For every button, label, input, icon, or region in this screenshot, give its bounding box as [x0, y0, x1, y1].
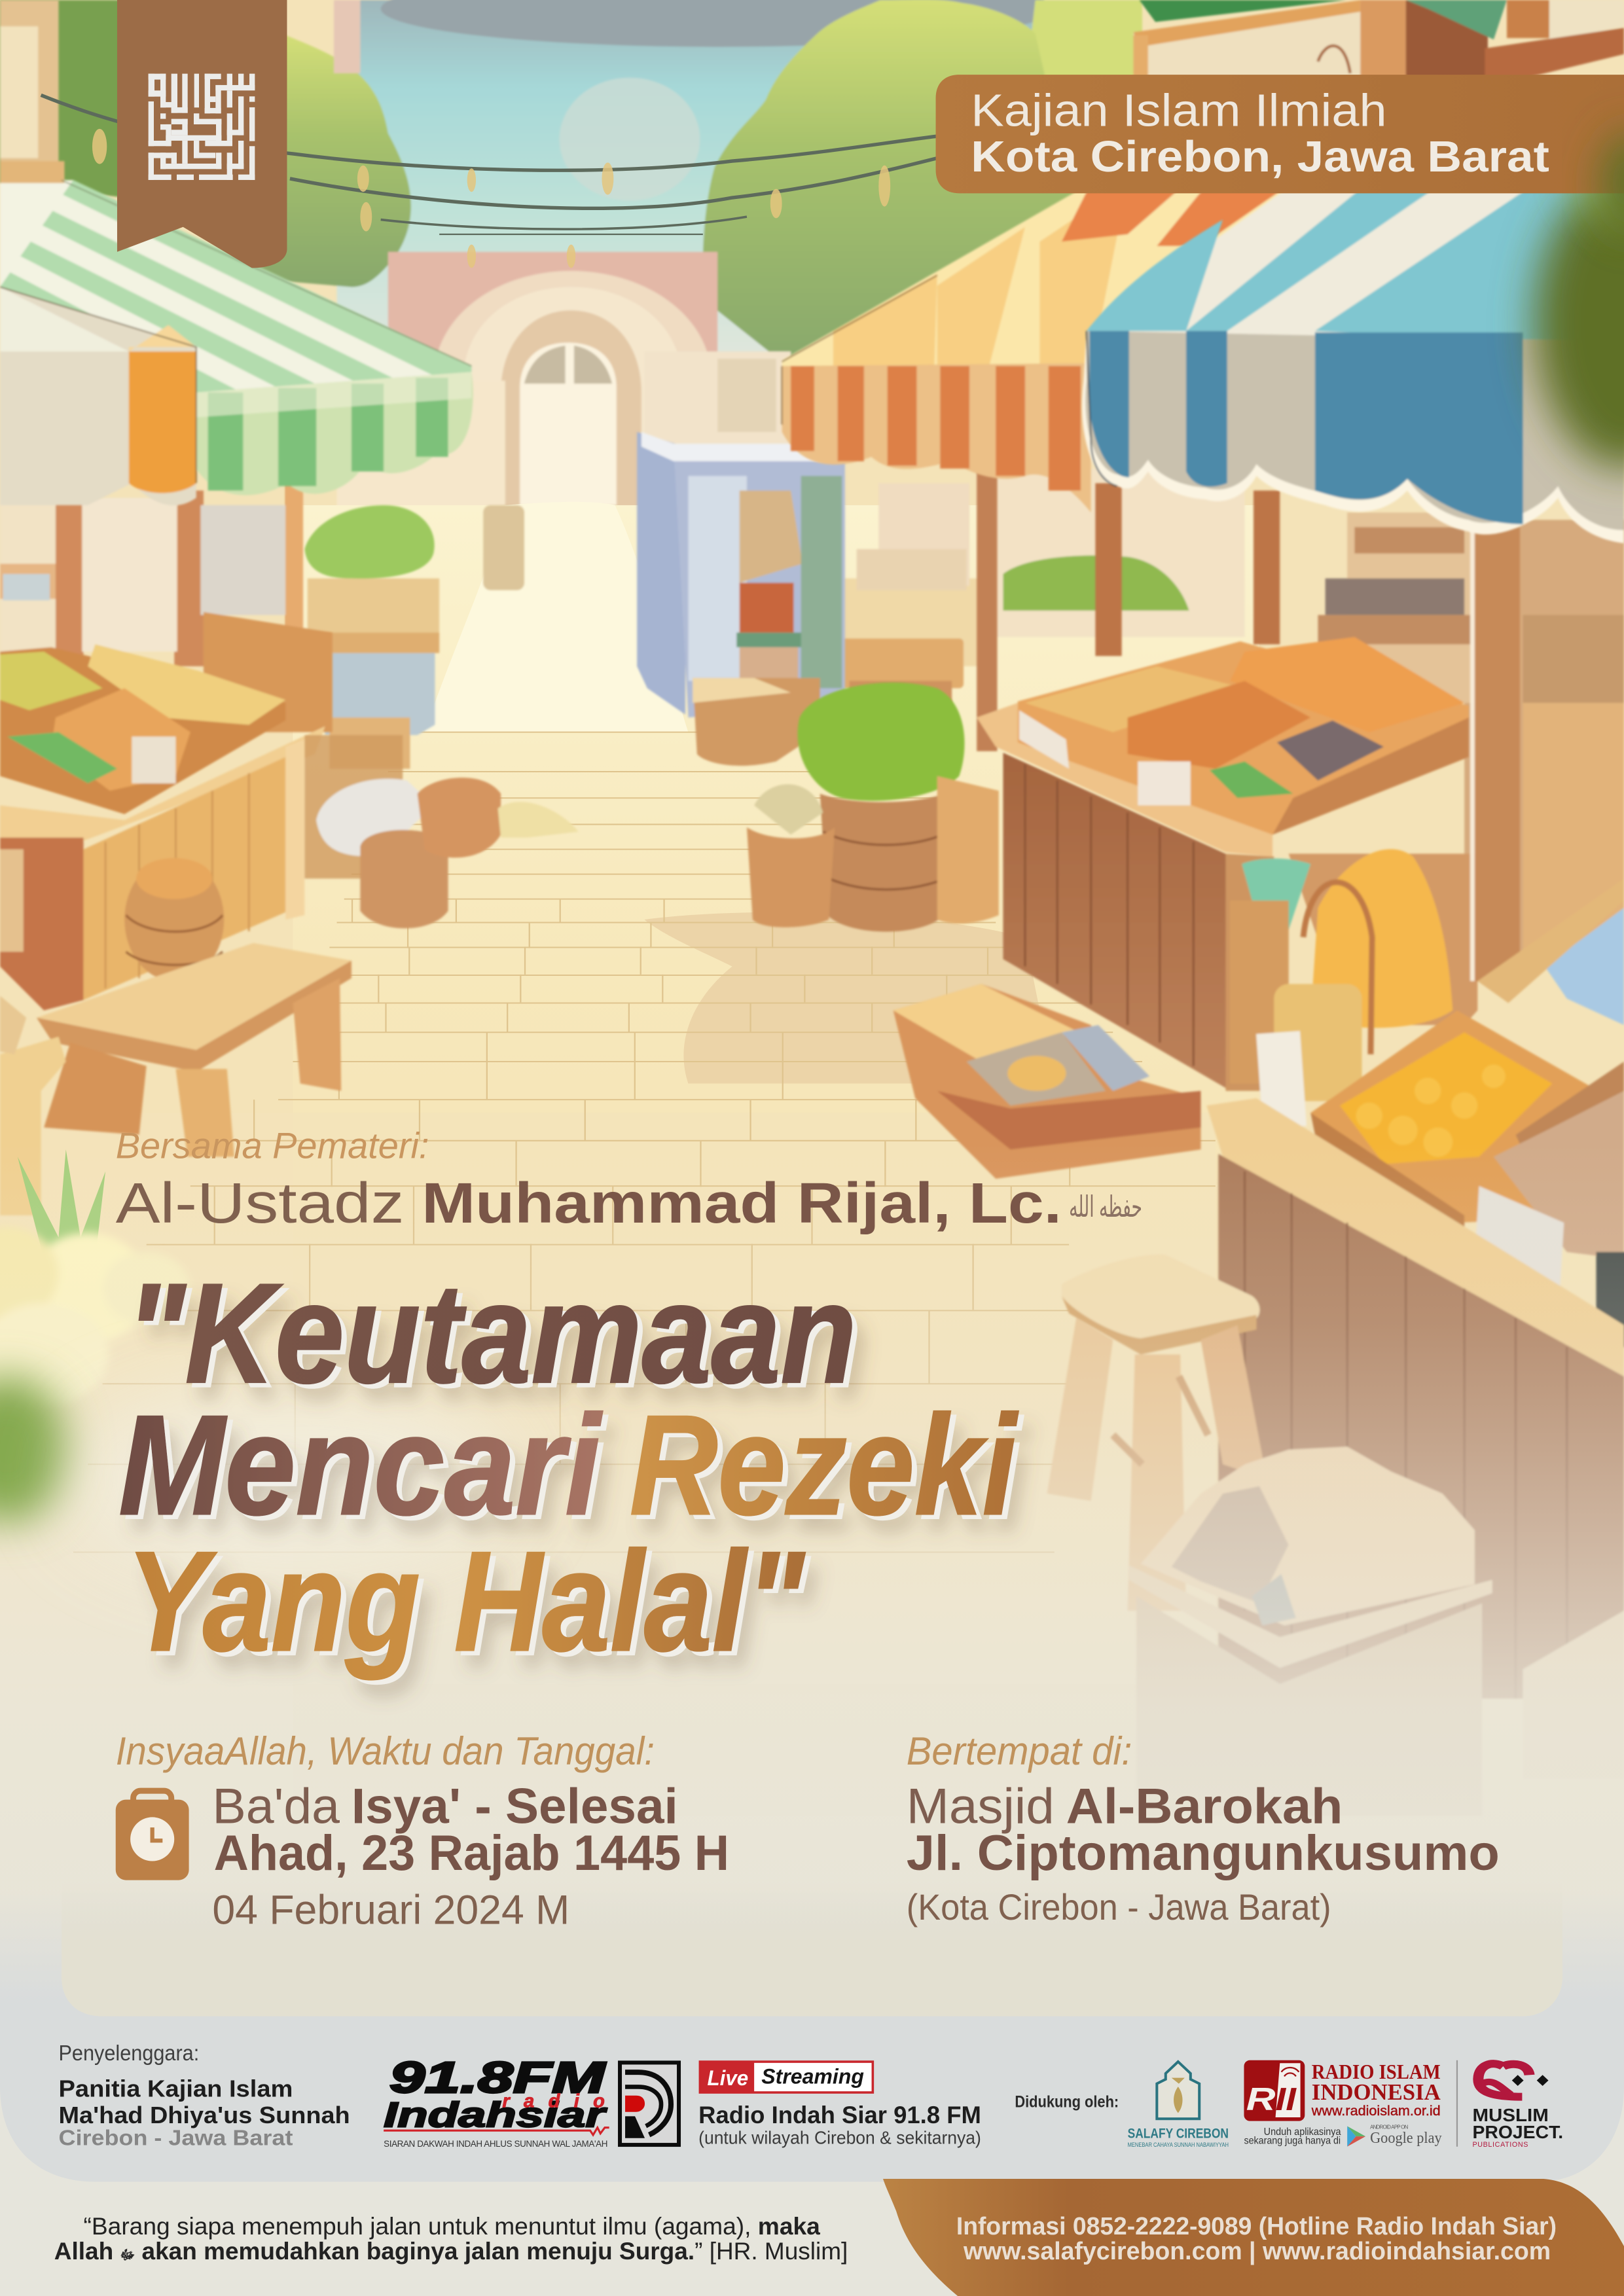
text: tagline: SIARAN DAKWAH INDAH AHLUS SUNNAH WAL JAMA'AH: [384, 2139, 607, 2149]
text: websites: www.salafycirebon.com | www.radioindahsiar.com: [963, 2238, 1551, 2265]
text: city: Kota Cirebon, Jawa Barat: [971, 132, 1549, 181]
text: title line three: Yang Halal": [126, 1522, 806, 1680]
scene: sky, trees and building: [0, 0, 1142, 703]
icon: RII square: II: [1276, 2081, 1297, 2117]
icon: play store triangle: [1347, 2126, 1365, 2147]
text: android app on: ANDROID APP ON: [1370, 2125, 1409, 2130]
icon: signal underline: [384, 2128, 609, 2135]
speaker block: [116, 1125, 1142, 1235]
text: app prompt line one: Unduh aplikasinya: [1264, 2126, 1341, 2138]
icon: kufic square: [149, 74, 255, 180]
text: supported by: Didukung oleh:: [1015, 2093, 1119, 2111]
icon: RII square: [1244, 2060, 1305, 2121]
text: speaker name: Muhammad Rijal, Lc.: [422, 1172, 1062, 1235]
text: venue city: (Kota Cirebon - Jawa Barat): [907, 1886, 1331, 1928]
panel: contact information: [883, 2179, 1624, 2296]
text: organizer city: Cirebon - Jawa Barat: [58, 2126, 293, 2151]
text: event series: Kajian Islam Ilmiah: [971, 84, 1387, 135]
text: title line two dark: Mencari: [118, 1386, 603, 1544]
panel: footer sponsor band: [0, 1882, 1624, 2181]
icon: live streaming badge: [700, 2062, 873, 2092]
text: radio: radio: [502, 2090, 605, 2111]
scene: solid lower background: [0, 2043, 1624, 2296]
scene: right market stall: [747, 458, 1624, 1816]
scene: left market stall: [0, 469, 579, 1215]
icon: clipboard clock: [116, 1791, 189, 1880]
text: title line one: "Keutamaan: [126, 1254, 857, 1412]
text: store label: Google play: [1370, 2129, 1442, 2147]
text: venue name: Al-Barokah: [1066, 1778, 1343, 1834]
icon: live streaming badge: Live: [708, 2066, 748, 2090]
text: publications: PUBLICATIONS: [1472, 2141, 1528, 2149]
scene: lamp strings: [41, 95, 937, 234]
text: venue label: Bertempat di:: [907, 1729, 1132, 1773]
text: quote line two: Allah ﷻ akan memudahkan baginya jalan menuju Surga.” [HR. Muslim]: [54, 2238, 848, 2265]
ribbon with kufic calligraphy: [117, 0, 287, 268]
divider between logos: [1456, 2060, 1458, 2147]
logo: radio islam indonesia: [1244, 2060, 1442, 2147]
icon: live streaming badge: Streaming: [761, 2065, 864, 2089]
text: organizer line one: Panitia Kajian Islam: [58, 2076, 293, 2102]
text: stream station: Radio Indah Siar 91.8 FM: [698, 2102, 981, 2128]
text: speaker title: Al-Ustadz: [116, 1172, 404, 1235]
main title: [118, 1254, 1019, 1680]
scene: white fade into lower panel: [0, 1142, 1624, 2050]
hadith quote: [54, 2213, 848, 2265]
text: speaker label: Bersama Pemateri:: [116, 1125, 429, 1166]
icon: hanging light bulbs: [92, 129, 890, 268]
event time block: [116, 1729, 729, 1933]
organizer text: [58, 2041, 350, 2151]
text: stream region: (untuk wilayah Cirebon & sekitarnya): [698, 2127, 981, 2147]
text: app prompt line two: sekarang juga hanya di: [1244, 2135, 1341, 2146]
text: time start: Ba'da: [212, 1778, 340, 1834]
scene: left awnings: [0, 0, 473, 505]
text: muslim: MUSLIM: [1472, 2105, 1549, 2125]
scene: paved walkway: [0, 502, 1259, 1816]
text: time label: InsyaaAllah, Waktu dan Tanggal:: [116, 1729, 655, 1773]
text: quote line one: “Barang siapa menempuh jalan untuk menuntut ilmu (agama), maka: [84, 2213, 820, 2240]
text: honorific: حفظه الله: [1069, 1191, 1142, 1223]
text: salafy name: SALAFY CIREBON: [1128, 2125, 1229, 2141]
scene: blurred leaves: [0, 132, 1624, 1567]
streaming block: [698, 2062, 981, 2147]
icon: heart mark: [1478, 2064, 1549, 2097]
scene: foreground vegetables: [0, 1149, 190, 1406]
icon: RII square: R: [1246, 2081, 1276, 2117]
scene: far stalls and greens: [285, 469, 1245, 769]
text: title line two accent: Rezeki: [630, 1386, 1019, 1544]
text: RII url: www.radioislam.or.id: [1311, 2103, 1441, 2119]
badge: event title: [936, 75, 1624, 234]
logo: radio indah siar: [384, 2053, 679, 2149]
logo: salafy cirebon: [1128, 2062, 1229, 2148]
text: hijri date: Ahad, 23 Rajab 1445 H: [214, 1825, 729, 1881]
scene: blurred leaf over badge: [1600, 132, 1624, 234]
text: salafy tagline: MENEBAR CAHAYA SUNNAH NABAWIYYAH: [1128, 2142, 1229, 2148]
text: gregorian date: 04 Februari 2024 M: [212, 1888, 569, 1933]
text: frequency: 91.8FM: [389, 2053, 607, 2102]
scene: right orange awning: [782, 183, 1303, 512]
scene: right blue awning: [1082, 183, 1624, 543]
text: organizer label: Penyelenggara:: [58, 2041, 199, 2066]
icon: station emblem: [620, 2062, 679, 2145]
logo: muslim project: [1472, 2064, 1563, 2149]
text: contact phone: Informasi 0852-2222-9089 (Hotline Radio Indah Siar): [956, 2213, 1557, 2240]
icon: mosque arch: [1157, 2062, 1199, 2119]
text: RII line one: RADIO ISLAM: [1312, 2060, 1441, 2083]
text: station name: Indahsiar: [384, 2096, 607, 2135]
scene: stall roof at top right: [1134, 0, 1624, 88]
text: venue prefix: Masjid: [907, 1778, 1055, 1834]
scene: refrigerator: [637, 432, 845, 766]
event venue block: [907, 1729, 1500, 1928]
text: street: Jl. Ciptomangunkusumo: [907, 1825, 1500, 1881]
text: RII line two: INDONESIA: [1312, 2080, 1441, 2105]
text: time range: Isya' - Selesai: [352, 1778, 678, 1834]
text: organizer line two: Ma'had Dhiya'us Sunnah: [58, 2102, 350, 2128]
text: project: PROJECT.: [1472, 2122, 1563, 2142]
